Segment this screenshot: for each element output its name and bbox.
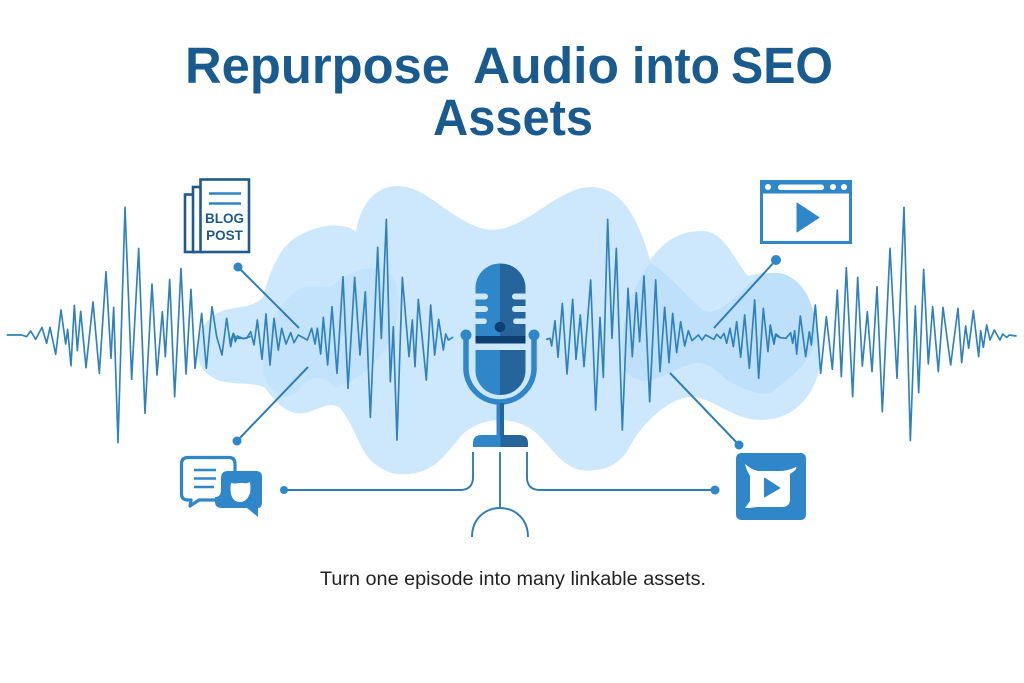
icon: blog post <box>185 180 249 252</box>
icon: square video clip <box>736 453 806 520</box>
title: SEO <box>731 37 833 94</box>
mic grille <box>475 294 526 324</box>
icon: blog post: POST <box>206 228 244 243</box>
mic cradle <box>466 335 534 402</box>
connector: video player <box>714 255 781 328</box>
waveform left inner <box>230 219 453 440</box>
icon: blog post: BLOG <box>205 211 244 226</box>
microphone <box>460 263 540 447</box>
waveform right inner <box>547 219 780 430</box>
mic stem and base <box>496 403 500 436</box>
title <box>185 37 833 146</box>
title: Repurpose <box>185 37 450 94</box>
connector: square video <box>670 373 744 450</box>
title: into <box>632 37 720 94</box>
mic body <box>476 264 500 336</box>
title: Assets <box>433 89 593 146</box>
connector lines below microphone <box>280 452 720 537</box>
caption: Turn one episode into many linkable assets. <box>320 569 706 590</box>
connector: blog post <box>234 262 299 328</box>
connector: chat <box>232 367 308 446</box>
waveform right outer <box>770 207 1016 441</box>
background sound blobs <box>197 186 820 474</box>
title: Audio <box>473 37 619 94</box>
icon: chat bubbles <box>182 458 262 517</box>
icon: video player window <box>760 180 852 242</box>
waveform left outer <box>7 207 250 443</box>
